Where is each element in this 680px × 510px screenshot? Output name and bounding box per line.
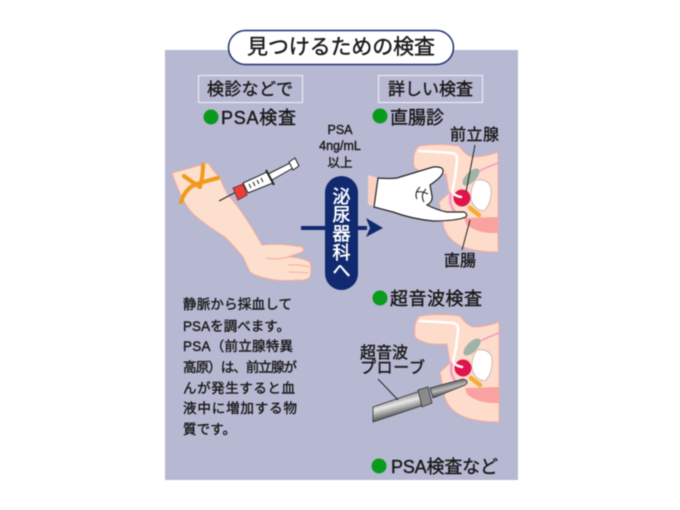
arrow [301,218,383,237]
heading: detailed exam: 詳しい検査 [388,80,473,99]
label: PSA threshold: PSA [327,123,353,137]
label: prostate: 前立腺 [450,126,499,144]
callout: urology referral: 器 [332,224,350,244]
label: ultrasound probe: プローブ [360,358,425,377]
callout: urology referral: へ [332,261,350,281]
label: prostate [450,126,499,192]
diagram: digital rectal exam anatomy [414,144,498,252]
panel: background [165,50,518,480]
label: ultrasound exam: 超音波検査 [390,289,482,309]
callout: urology referral: 科 [332,243,350,263]
title: 見つけるための検査 [247,36,435,59]
label: ultrasound probe [360,344,425,400]
icon: gloved hand [368,167,467,221]
heading: screening: 検診などで [207,80,293,99]
icon: arm with tourniquet [172,163,311,281]
label: ultrasound probe: 超音波 [360,344,408,362]
title [228,30,454,64]
text block: description: 質です。 [183,422,236,437]
text block: description: PSA（前立腺特異 [183,338,293,354]
diagram: ultrasound anatomy [415,314,499,422]
label: PSA threshold [319,123,361,170]
text block: description [183,297,298,437]
text block: description: 高原）は、前立腺が [183,359,298,375]
label: rectum: 直腸 [444,252,476,270]
label: digital rectal exam: 直腸診 [390,108,444,128]
text block: description: PSAを調べます。 [183,319,290,334]
callout: urology referral: 泌 [332,187,350,207]
text block: description: んが発生すると血 [183,381,295,396]
label: PSA threshold: 4ng/mL [319,139,361,153]
label: rectum [444,220,476,270]
icon: syringe [219,158,299,201]
heading: screening [198,76,302,102]
heading: detailed exam [378,76,482,102]
icon: ultrasound probe [373,379,467,422]
callout: urology referral: 尿 [332,205,350,225]
label: PSA threshold: 以上 [327,156,353,170]
callout: urology referral [325,176,358,290]
text block: description: 液中に増加する物 [183,401,297,416]
text block: description: 静脈から採血して [183,297,292,312]
label: PSA test and others: PSA検査など [391,457,498,477]
label: PSA test: PSA検査 [221,108,296,128]
